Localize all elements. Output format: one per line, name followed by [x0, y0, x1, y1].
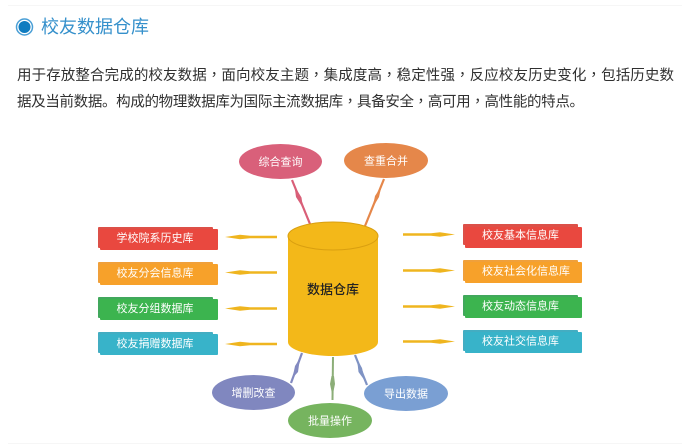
- arrow: to batch operation: [330, 357, 335, 400]
- ellipse: export data: [364, 376, 448, 411]
- right box: activity info: [463, 295, 582, 318]
- ellipse: export data: 导出数据: [384, 386, 428, 400]
- ellipse: add delete edit query: 增删改查: [232, 386, 276, 400]
- right box: basic info: [463, 224, 582, 248]
- left box: branch info: 校友分会信息库: [116, 266, 194, 280]
- ellipse: comprehensive query: [239, 144, 322, 179]
- right box: social info: [463, 260, 582, 283]
- arrow: to export data: [355, 355, 367, 385]
- description text: 据及当前数据。构成的物理数据库为国际主流数据库，具备安全，高可用，高性能的特点。: [17, 90, 584, 112]
- left arrows: [225, 235, 277, 346]
- right box: social info: 校友社会化信息库: [482, 264, 570, 278]
- arrow: to add delete edit query: [291, 353, 302, 383]
- right box: basic info: 校友基本信息库: [482, 228, 559, 242]
- left box: school history: [98, 227, 218, 250]
- left box: group data: [98, 297, 218, 320]
- icon: title bullet: [16, 19, 32, 35]
- right arrows: [403, 232, 455, 344]
- cylinder: data warehouse: [288, 222, 378, 356]
- ellipse: add delete edit query: [212, 375, 295, 410]
- left box: donation data: [98, 332, 218, 355]
- left box: donation data: 校友捐赠数据库: [116, 336, 194, 350]
- ellipse: dedupe merge: 查重合并: [364, 154, 408, 168]
- left box: branch info: [98, 262, 218, 285]
- ellipse: batch operation: [288, 403, 372, 438]
- ellipse: comprehensive query: 综合查询: [258, 154, 302, 168]
- ellipse: batch operation: 批量操作: [308, 414, 352, 428]
- title: 校友数据仓库: [41, 17, 149, 37]
- right box: social network info: [463, 330, 582, 353]
- ellipse: dedupe merge: [344, 143, 428, 178]
- right box: activity info: 校友动态信息库: [482, 298, 559, 312]
- left box: group data: 校友分组数据库: [116, 301, 194, 315]
- description text: 用于存放整合完成的校友数据，面向校友主题，集成度高，稳定性强，反应校友历史变化，包括历史数: [17, 64, 674, 85]
- right box: social network info: 校友社交信息库: [482, 334, 559, 348]
- arrow: warehouse to dedupe merge: [365, 179, 384, 226]
- description text: [17, 64, 674, 112]
- left box: school history: 学校院系历史库: [116, 230, 194, 244]
- cylinder: data warehouse: 数据仓库: [307, 282, 359, 297]
- arrow: warehouse to comprehensive query: [292, 180, 310, 224]
